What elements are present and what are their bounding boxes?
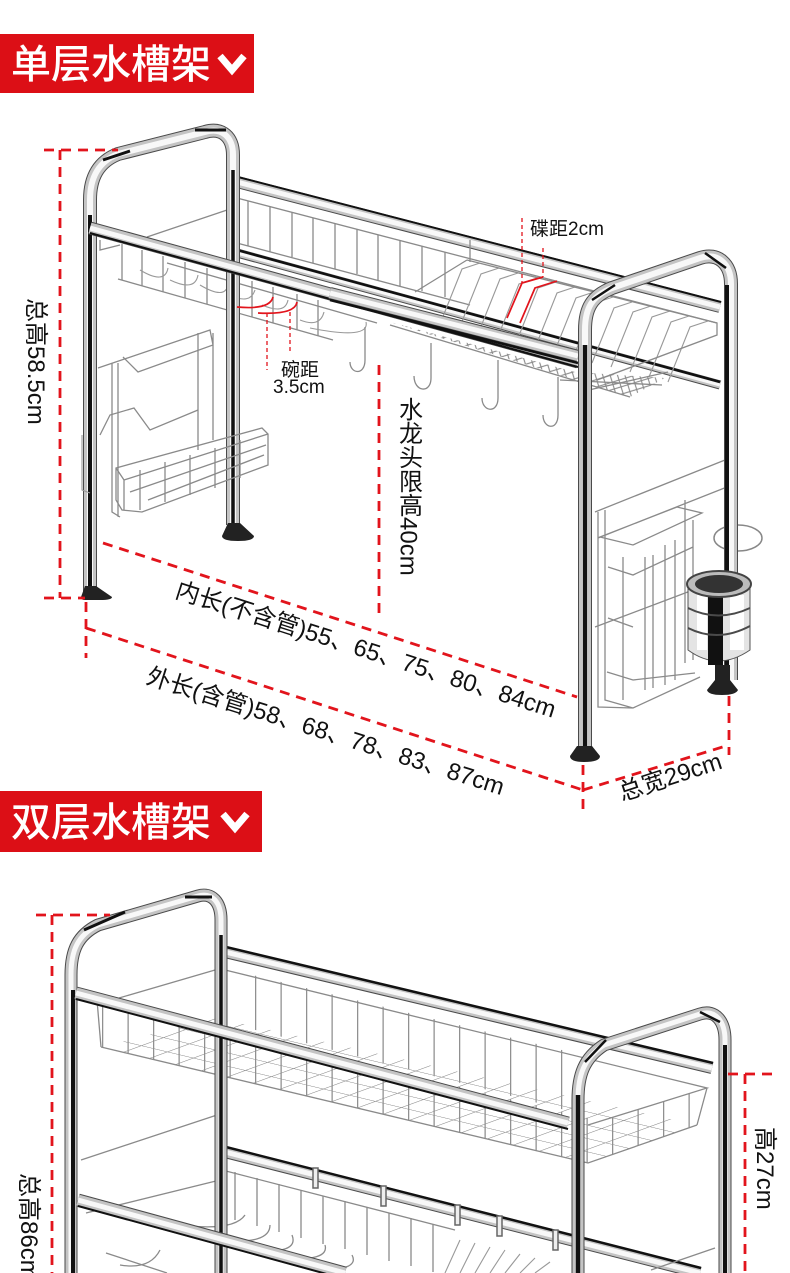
cutting board rack	[82, 330, 268, 517]
label: dish spacing: 碟距2cm	[530, 218, 604, 240]
heading text: 双层水槽架	[11, 801, 211, 845]
lower basket wires	[81, 1115, 715, 1273]
left frame	[90, 130, 233, 592]
single-layer rack illustration	[81, 130, 762, 762]
label: total width: 总宽29cm	[616, 748, 725, 807]
header: single-layer rack	[0, 34, 254, 93]
icon: chevron down	[220, 56, 244, 70]
hooks	[350, 327, 558, 426]
knife and cutlery holder	[595, 460, 762, 708]
header: double-layer rack	[0, 791, 262, 852]
right frame	[578, 1012, 725, 1273]
right feet	[570, 665, 738, 762]
label: outer length: 外长(含管)58、68、78、83、87cm	[143, 663, 507, 801]
back rails	[237, 177, 721, 385]
dimension lines: double rack	[36, 915, 775, 1273]
cutlery cup	[687, 571, 751, 665]
icon: chevron down	[223, 814, 247, 828]
double-layer rack illustration	[71, 895, 725, 1273]
lower back rail with rings	[225, 1147, 701, 1273]
front rail	[90, 228, 578, 367]
dish rack wires	[415, 240, 717, 382]
bowl rack wires	[100, 208, 377, 340]
label: bowl spacing: 碗距	[281, 359, 319, 381]
heading text: 单层水槽架	[11, 43, 211, 87]
label: faucet limit height: 水龙头限高40cm	[394, 397, 422, 576]
upper basket	[97, 968, 707, 1163]
label: bowl spacing: 3.5cm	[273, 377, 325, 398]
back wire panel	[233, 197, 717, 323]
upper back rail	[225, 947, 713, 1068]
label: height: 高27cm	[751, 1127, 778, 1210]
label: inner length: 内长(不含管)55、65、75、80、84cm	[172, 577, 559, 724]
label: total height: 总高58.5cm	[22, 298, 49, 425]
right frame	[585, 253, 731, 750]
front rails	[76, 993, 568, 1273]
left feet	[81, 523, 254, 600]
bowl spacing marks	[237, 218, 557, 370]
mesh basket	[390, 322, 668, 397]
dimension lines: single rack	[44, 150, 729, 815]
label: bowl spacing	[273, 359, 325, 398]
left frame	[71, 895, 221, 1273]
